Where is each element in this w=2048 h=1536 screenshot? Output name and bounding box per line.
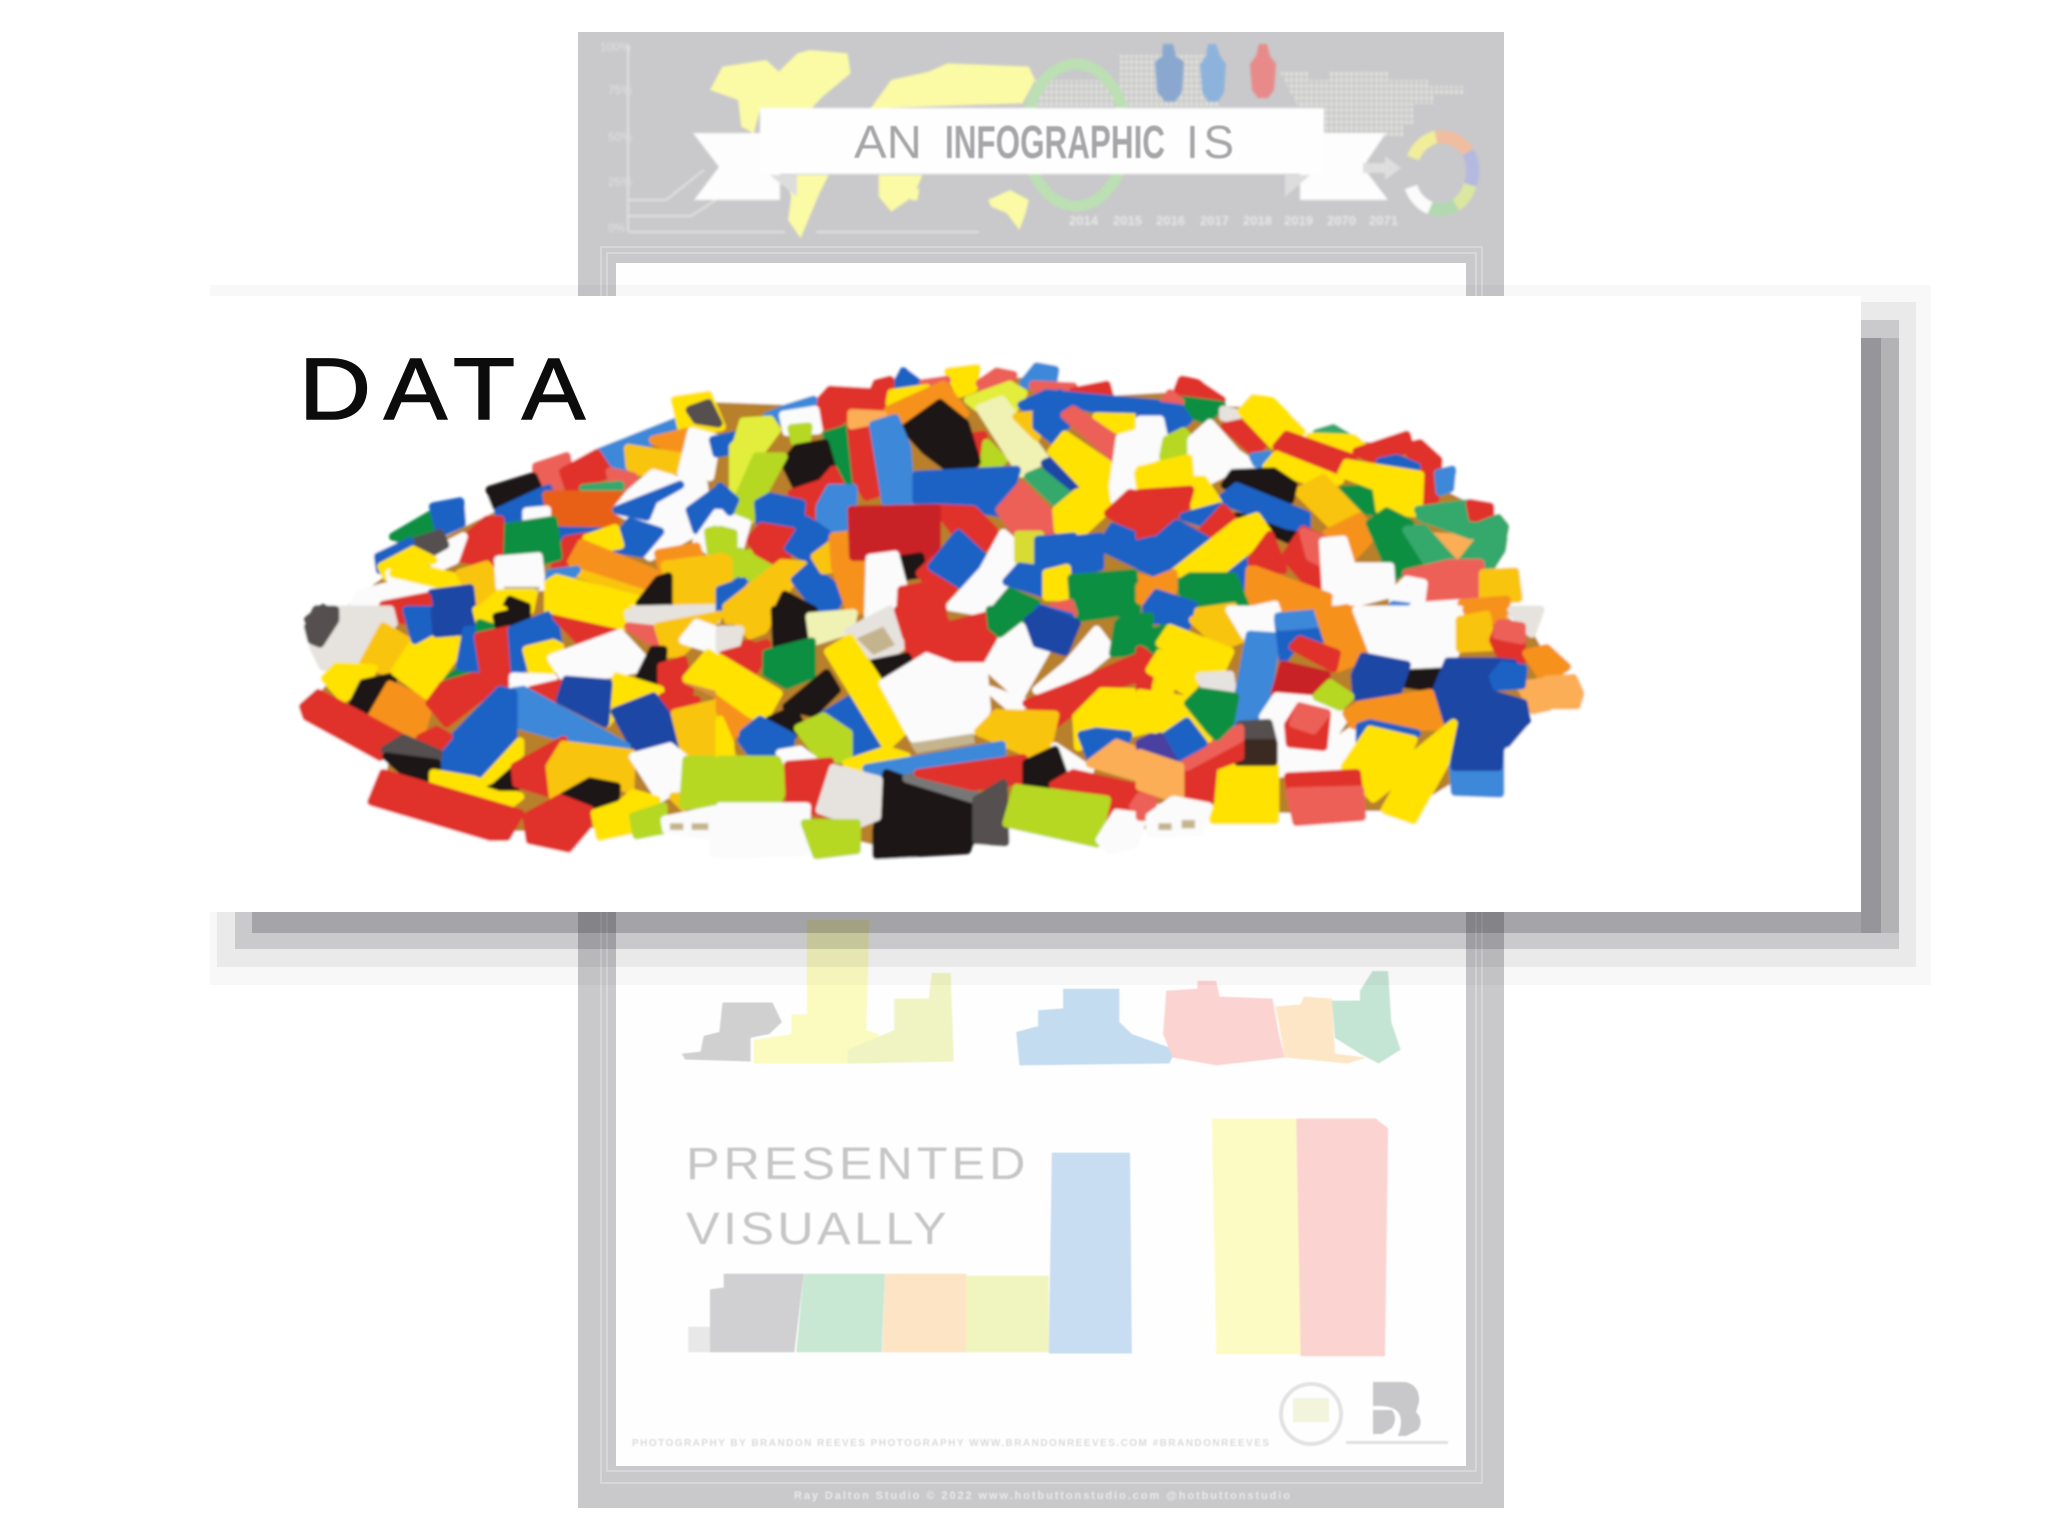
faded brick bar chart [688, 1118, 1388, 1356]
axis labels: 100% [600, 40, 631, 54]
bricks: lower left [303, 610, 750, 855]
poster white content area [616, 263, 1466, 1466]
bricks: upper left [308, 395, 750, 620]
arrow icon [1363, 156, 1401, 180]
photo credit: PHOTOGRAPHY BY BRANDON REEVES PHOTOGRAPHY WWW.BRANDONREEVES.COM #BRANDONREEVES [632, 1438, 1269, 1449]
poster title [854, 116, 1234, 168]
year labels: 2070 [1327, 213, 1356, 228]
year labels: 2016 [1156, 213, 1185, 228]
axis labels [600, 40, 632, 235]
bricks: lower right [1140, 610, 1580, 833]
axis labels: 0% [608, 221, 626, 235]
year labels: 2071 [1369, 213, 1398, 228]
faded brick skyline [682, 920, 1401, 1065]
bricks: upper right [1140, 380, 1537, 620]
illustration: pile of toy bricks [303, 367, 1580, 855]
people silhouettes [1155, 44, 1276, 102]
year labels: 2018 [1243, 213, 1272, 228]
poster footer credit: Ray Dalton Studio © 2022 www.hotbuttonstudio.com @hotbuttonstudio [794, 1490, 1290, 1502]
background poster [578, 32, 1504, 1508]
poster title: AN [854, 116, 922, 168]
poster header graphic [600, 40, 1473, 238]
axis labels: 75% [608, 83, 632, 97]
bricks: lower middle [720, 610, 1170, 855]
yellow world map [710, 50, 1035, 238]
chart lines [628, 45, 979, 232]
dotted world map [1035, 55, 1464, 138]
axis labels: 50% [608, 130, 632, 144]
year labels: 2014 [1069, 213, 1099, 228]
heading: DATA [299, 341, 585, 438]
year labels [1069, 213, 1398, 228]
logo: round seal [1281, 1384, 1341, 1444]
axis labels: 25% [608, 175, 632, 189]
poster text: presented visually [686, 1139, 1029, 1254]
banner [693, 108, 1388, 200]
poster text: presented visually: PRESENTED [686, 1139, 1029, 1189]
poster text: presented visually: VISUALLY [686, 1204, 950, 1254]
year labels: 2017 [1200, 213, 1229, 228]
card drop shadow [210, 285, 1931, 985]
heading: DATA: T [453, 341, 515, 438]
poster title: IS [1186, 116, 1234, 168]
heading: DATA: D [299, 341, 371, 438]
heading: DATA: A [522, 341, 585, 438]
heading: DATA: A [384, 341, 447, 438]
bricks: upper middle [720, 367, 1170, 620]
poster title: INFOGRAPHIC [945, 116, 1165, 168]
logo: B mark [1346, 1382, 1448, 1444]
year labels: 2019 [1284, 213, 1313, 228]
donut icon [1411, 137, 1473, 210]
green ring [1026, 64, 1126, 206]
year labels: 2015 [1113, 213, 1142, 228]
poster frame [601, 247, 1482, 1483]
panel: data card [189, 296, 1861, 912]
